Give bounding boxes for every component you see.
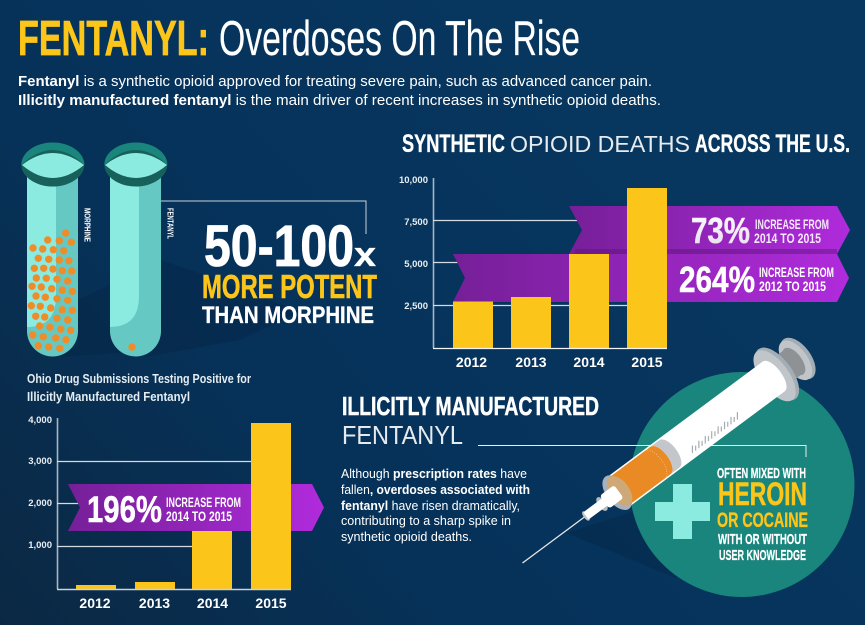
stat: 196 percent: 2014 TO 2015 [166, 508, 232, 524]
heading: synthetic opioid deaths: OPIOID DEATHS [510, 131, 690, 157]
year labels [456, 354, 663, 370]
stat: 73 percent: 73% [691, 210, 750, 251]
heading: illicitly manufactured fentanyl [342, 391, 599, 450]
chart: Ohio drug submissions [28, 415, 324, 611]
barrel scale marks [689, 412, 741, 453]
heading: Ohio chart [27, 371, 251, 404]
axis labels: 1,000 [28, 540, 52, 551]
stat: 196 percent [87, 489, 241, 530]
connector line: heading to callout [478, 446, 806, 457]
stat: 73 percent: 2014 TO 2015 [754, 230, 821, 246]
heading: Ohio chart: Ohio Drug Submissions Testing Positive for [27, 371, 251, 386]
year labels: 2014 [197, 595, 228, 611]
potency callout: x [354, 236, 376, 274]
callout: often mixed with heroin or cocaine: OFTEN MIXED WITH [717, 465, 806, 482]
tube shadows [60, 260, 300, 357]
stat: 264 percent [679, 259, 834, 300]
axis labels [399, 175, 428, 312]
axis labels: 3,000 [28, 456, 52, 467]
dotted arc in liquid [645, 446, 672, 478]
callout: often mixed with heroin or cocaine: HEROIN [718, 476, 807, 512]
needle [522, 516, 585, 563]
year labels: 2015 [631, 354, 663, 370]
intro text: Illicitly manufactured fentanyl is the main driver of recent increases in synthetic opioid deaths. [18, 93, 661, 109]
fentanyl dot [128, 343, 136, 351]
intro text: Fentanyl is a synthetic opioid approved for treating severe pain, such as advanced cancer pain. [18, 74, 652, 90]
morphine label: MORPHINE [82, 208, 92, 243]
title [18, 12, 580, 66]
heading: illicitly manufactured fentanyl: FENTANYL [342, 420, 463, 450]
icon: morphine test tube [21, 142, 84, 356]
front disc [596, 470, 638, 515]
axis labels: 10,000 [399, 175, 428, 186]
body paragraph: fallen, overdoses associated with [341, 483, 530, 497]
intro text [18, 74, 661, 109]
shadow under upper ribbon [575, 249, 837, 254]
icon: fentanyl test tube [104, 142, 167, 356]
title: Overdoses On The Rise [219, 12, 580, 66]
year labels: 2013 [139, 595, 170, 611]
other bars [76, 423, 291, 589]
year labels: 2013 [515, 354, 547, 370]
bar: 2014 [192, 520, 232, 589]
callout: often mixed with heroin or cocaine: OR COCAINE [717, 509, 808, 532]
year labels: 2012 [456, 354, 487, 370]
stat: 196 percent: INCREASE FROM [166, 494, 241, 510]
axis labels: 2,000 [28, 498, 52, 509]
nozzle [579, 485, 624, 524]
heading: illicitly manufactured fentanyl: ILLICITLY MANUFACTURED [342, 391, 599, 421]
teal circle [630, 372, 854, 597]
year labels: 2012 [79, 595, 111, 611]
stat: 73 percent [691, 210, 829, 251]
stat: 264 percent: 264% [679, 259, 755, 300]
potency callout: MORE POTENT [202, 268, 377, 305]
chart: synthetic opioid deaths [399, 175, 850, 370]
connector line: tube to potency callout [161, 201, 366, 234]
ribbon: 264 percent [453, 254, 849, 302]
potency callout [202, 214, 377, 329]
ribbon: 196 percent [68, 484, 324, 531]
callout: often mixed with heroin or cocaine: USER KNOWLEDGE [719, 547, 806, 564]
morphine dots [28, 229, 76, 352]
icon: plus sign [655, 484, 710, 539]
callout: often mixed with heroin or cocaine: WITH OR WITHOUT [718, 531, 807, 548]
plunger [745, 326, 827, 409]
fentanyl label: FENTANYL [166, 208, 174, 239]
body paragraph: Although prescription rates have [341, 467, 527, 481]
stat: 264 percent: 2012 TO 2015 [759, 278, 826, 294]
year labels [79, 595, 287, 611]
potency callout: THAN MORPHINE [202, 302, 374, 329]
axis labels: 4,000 [28, 415, 52, 426]
drug liquid [610, 442, 677, 505]
body paragraph: fentanyl have risen dramatically, [341, 499, 520, 513]
body paragraph: contributing to a sharp spike in [341, 514, 511, 528]
heading: Ohio chart: Illicitly Manufactured Fentanyl [27, 389, 190, 404]
year labels: 2014 [573, 354, 605, 370]
heading: synthetic opioid deaths: SYNTHETIC [402, 130, 505, 158]
potency callout: 50-100 [204, 214, 354, 279]
body paragraph: synthetic opioid deaths. [341, 530, 472, 544]
heading: synthetic opioid deaths [402, 130, 850, 158]
title: FENTANYL: [18, 12, 209, 66]
ribbon: 73 percent [569, 206, 850, 254]
axis labels [28, 415, 52, 551]
axis labels: 2,500 [404, 301, 428, 312]
icon: syringe [504, 326, 827, 588]
bars [453, 188, 667, 348]
axis labels: 5,000 [404, 259, 428, 270]
callout: often mixed with heroin or cocaine [717, 465, 808, 564]
barrel [605, 357, 791, 509]
year labels: 2015 [255, 595, 287, 611]
syringe shadow [566, 512, 676, 578]
stat: 196 percent: 196% [87, 489, 162, 530]
body paragraph [341, 467, 530, 544]
axis labels: 7,500 [404, 217, 428, 228]
plunger seal [650, 435, 686, 474]
